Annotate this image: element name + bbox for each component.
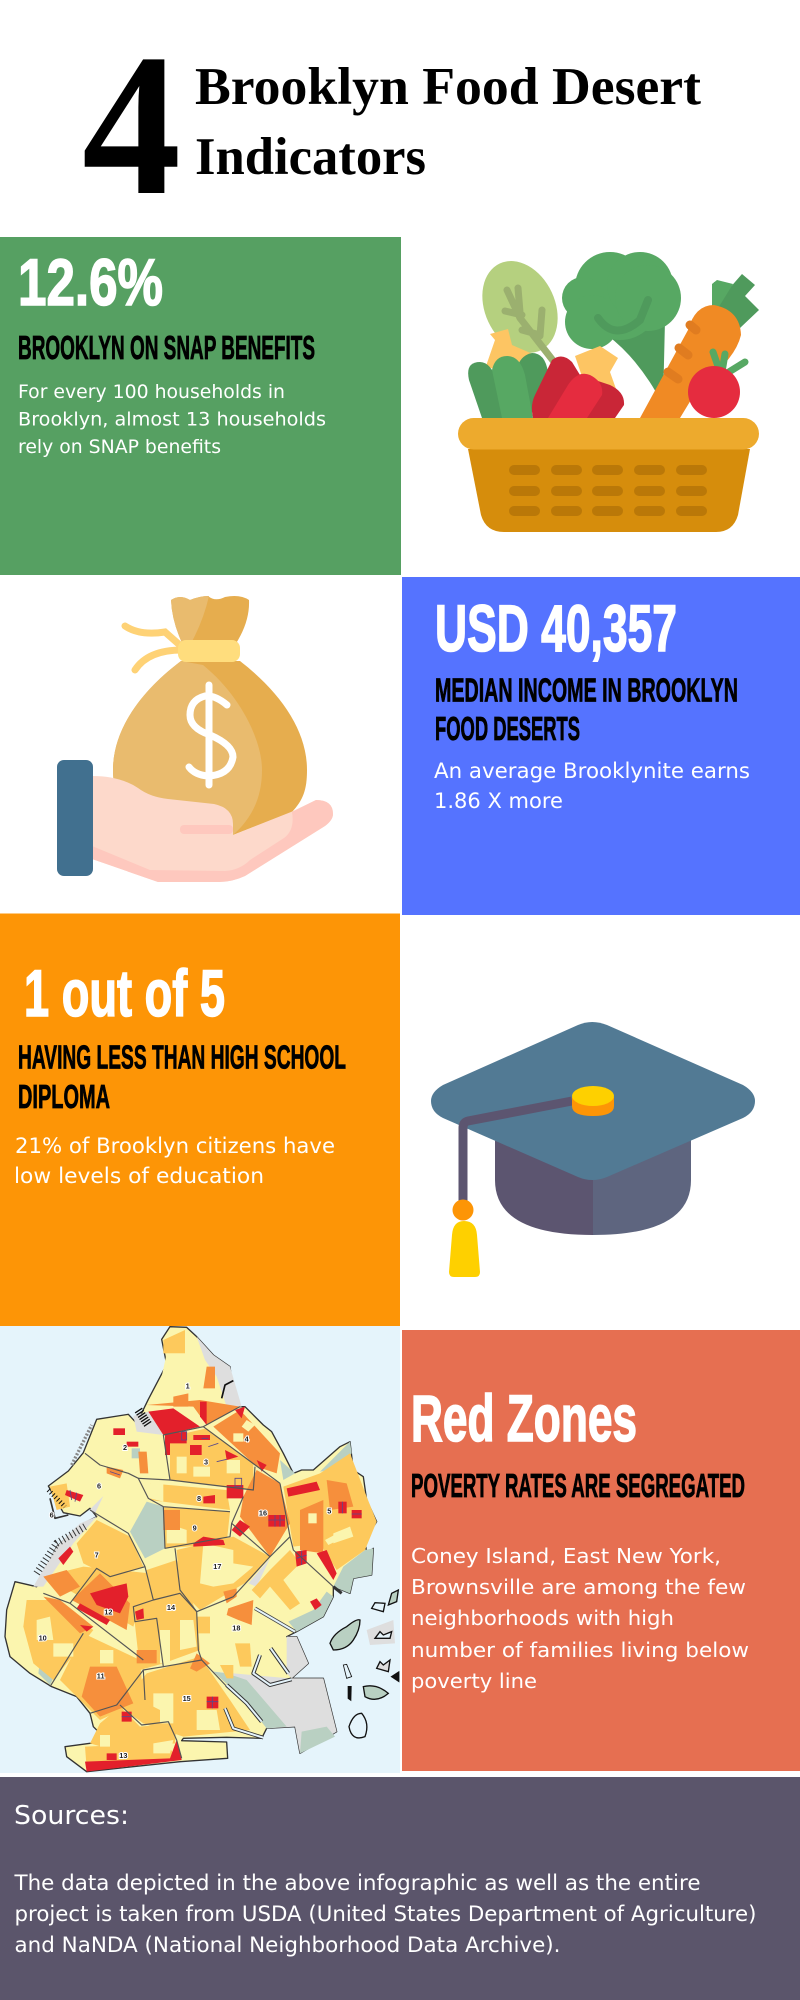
map: district numbers: 1 <box>186 1381 190 1390</box>
panel: median income: 1.86 X more <box>434 789 563 813</box>
panel: sources: Sources: <box>14 1801 129 1831</box>
map: district numbers: 16 <box>259 1508 267 1517</box>
panel: sources: and NaNDA (National Neighborhood Data Archive). <box>14 1933 560 1957</box>
map: district numbers: 14 <box>167 1603 176 1612</box>
panel: SNAP benefits: Brooklyn, almost 13 households <box>18 408 326 430</box>
panel: red zones: Coney Island, East New York, <box>411 1544 721 1568</box>
panel: red zones: Brownsville are among the few <box>411 1575 746 1599</box>
panel: sources: project is taken from USDA (United States Department of Agriculture) <box>14 1902 756 1926</box>
panel: SNAP benefits: 12.6% <box>18 245 163 319</box>
panel: sources <box>0 1777 800 2000</box>
map: district numbers <box>39 1381 331 1760</box>
panel: education <box>0 914 400 1326</box>
map: borough outline <box>5 1327 377 1772</box>
panel: SNAP benefits: BROOKLYN ON SNAP BENEFITS <box>18 329 315 366</box>
map: district numbers: 8 <box>197 1494 201 1503</box>
map: district numbers: 9 <box>193 1524 197 1533</box>
title <box>82 12 701 237</box>
icon: graduation cap <box>431 1022 755 1277</box>
panel: sources: The data depicted in the above infographic as well as the entire <box>13 1871 700 1895</box>
icon: money bag on hand <box>57 596 333 882</box>
panel: education: DIPLOMA <box>18 1078 110 1115</box>
title: Brooklyn Food Desert <box>195 58 701 116</box>
panel: red zones: poverty line <box>411 1669 537 1693</box>
map: district numbers: 11 <box>97 1671 105 1680</box>
panel: SNAP benefits: For every 100 households in <box>18 381 285 403</box>
panel: red zones: neighborhoods with high <box>411 1606 674 1630</box>
panel: median income: USD 40,357 <box>435 591 677 665</box>
panel: red zones <box>402 1330 800 1771</box>
map: district numbers: 2 <box>123 1443 127 1452</box>
panel: SNAP benefits <box>0 237 401 575</box>
map: district numbers: 3 <box>204 1458 208 1467</box>
icon: vegetable basket <box>458 249 759 532</box>
map: district numbers: 12 <box>104 1607 112 1616</box>
panel: education: HAVING LESS THAN HIGH SCHOOL <box>18 1038 346 1076</box>
panel: education: 1 out of 5 <box>24 956 225 1030</box>
panel: education: 21% of Brooklyn citizens have <box>15 1134 335 1158</box>
map: district numbers: 13 <box>119 1751 127 1760</box>
map: piers and inlets <box>37 1381 342 1738</box>
map: district numbers: 4 <box>245 1434 250 1443</box>
map: district numbers: 15 <box>183 1694 191 1703</box>
title: Indicators <box>195 128 426 186</box>
panel: median income: FOOD DESERTS <box>435 710 580 747</box>
map: district numbers: 17 <box>213 1562 221 1571</box>
map: district numbers: 6 <box>97 1481 101 1490</box>
panel: red zones: number of families living below <box>411 1638 749 1662</box>
map: district numbers: 18 <box>232 1624 240 1633</box>
map: district numbers: 7 <box>95 1550 99 1559</box>
panel: poverty map of Brooklyn <box>0 1326 400 1773</box>
map: district numbers: 5 <box>327 1507 331 1516</box>
map: district numbers: 10 <box>39 1633 47 1642</box>
panel: median income: An average Brooklynite earns <box>434 759 750 783</box>
title: 4 <box>82 12 181 237</box>
panel: median income <box>402 577 800 915</box>
panel: red zones: Red Zones <box>411 1381 637 1455</box>
panel: SNAP benefits: rely on SNAP benefits <box>18 436 221 458</box>
map: islands <box>330 1590 399 1738</box>
panel: education: low levels of education <box>14 1164 264 1188</box>
map: district numbers: 6 <box>50 1510 54 1519</box>
